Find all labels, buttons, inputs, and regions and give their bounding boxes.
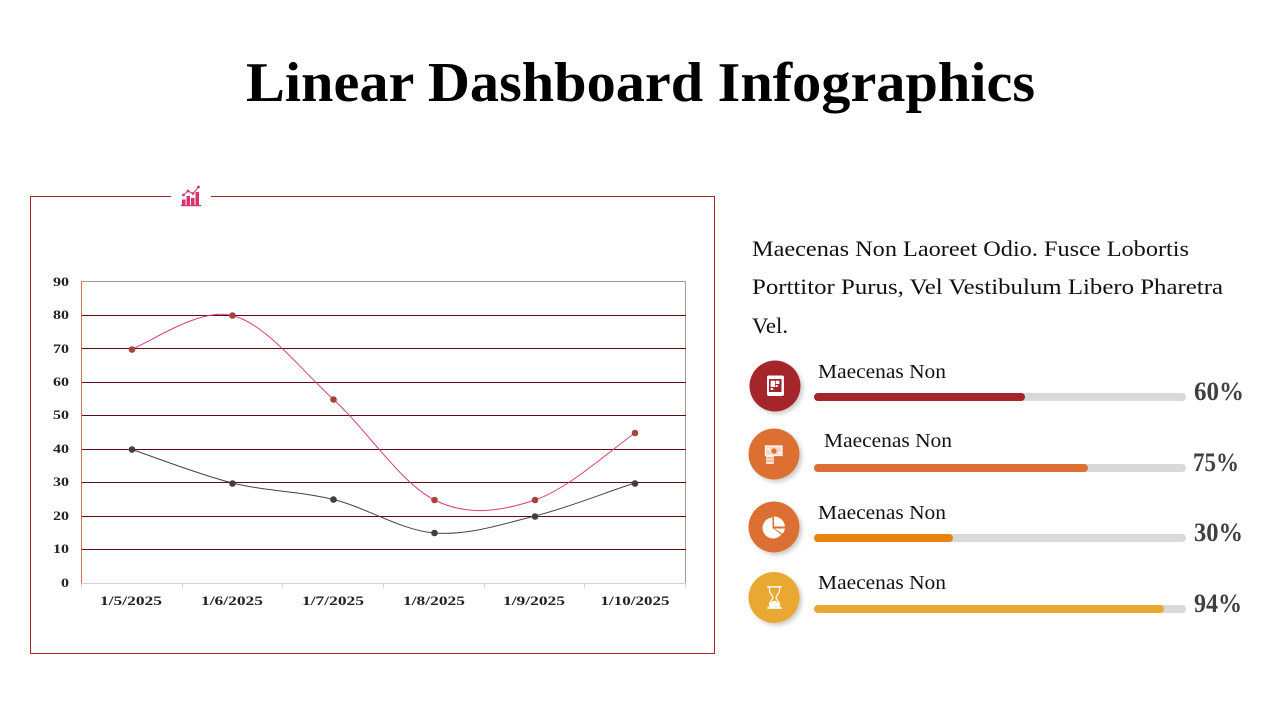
panel: chart frame — [30, 186, 714, 654]
icon: tablet — [750, 360, 800, 412]
series: dark line — [129, 446, 638, 536]
progress bar — [814, 393, 1186, 401]
label: Maecenas Non — [818, 361, 946, 383]
x axis labels: 1/5/2025 — [100, 594, 162, 608]
label: Maecenas Non — [824, 430, 952, 452]
icon: bar chart with trend line — [181, 186, 201, 206]
y axis labels: 60 — [53, 374, 69, 389]
value: 75% — [1193, 448, 1239, 477]
progress bar — [814, 605, 1186, 613]
y axis labels: 30 — [53, 474, 69, 489]
icon: pie chart — [748, 502, 800, 552]
icon: banknote and coins — [748, 428, 800, 480]
x axis labels: 1/9/2025 — [503, 594, 565, 608]
progress bar — [814, 464, 1186, 472]
y axis labels: 20 — [53, 508, 69, 523]
description text — [752, 236, 1223, 338]
y axis labels: 10 — [53, 541, 69, 556]
y axis labels: 70 — [53, 341, 69, 356]
row 1: 60% — [750, 360, 1244, 412]
value: 94% — [1194, 589, 1242, 618]
value: 60% — [1194, 377, 1244, 406]
x axis labels — [100, 594, 670, 608]
description text: Maecenas Non Laoreet Odio. Fusce Lobortis — [752, 236, 1189, 261]
label: Maecenas Non — [818, 572, 946, 594]
y axis labels: 90 — [53, 274, 69, 289]
value: 30% — [1194, 518, 1243, 547]
y axis labels: 50 — [53, 407, 69, 422]
y axis labels — [53, 274, 69, 590]
line chart — [53, 274, 686, 608]
description text: Porttitor Purus, Vel Vestibulum Libero Pharetra — [752, 274, 1223, 299]
row 3: 30% — [748, 502, 1243, 552]
description text: Vel. — [752, 313, 788, 338]
title: Linear Dashboard Infographics — [246, 52, 1035, 114]
row 4: 94% — [748, 572, 1242, 623]
x axis labels: 1/10/2025 — [600, 594, 670, 608]
x axis labels: 1/6/2025 — [201, 594, 263, 608]
y axis labels: 80 — [53, 307, 69, 322]
y axis labels: 0 — [61, 575, 69, 590]
series: pink line — [129, 312, 638, 511]
y axis labels: 40 — [53, 441, 69, 456]
row 2: 75% — [748, 428, 1239, 480]
icon: hourglass — [748, 572, 800, 623]
label: Maecenas Non — [818, 502, 946, 524]
x axis labels: 1/8/2025 — [403, 594, 465, 608]
progress bar — [814, 534, 1186, 542]
x axis labels: 1/7/2025 — [302, 594, 364, 608]
